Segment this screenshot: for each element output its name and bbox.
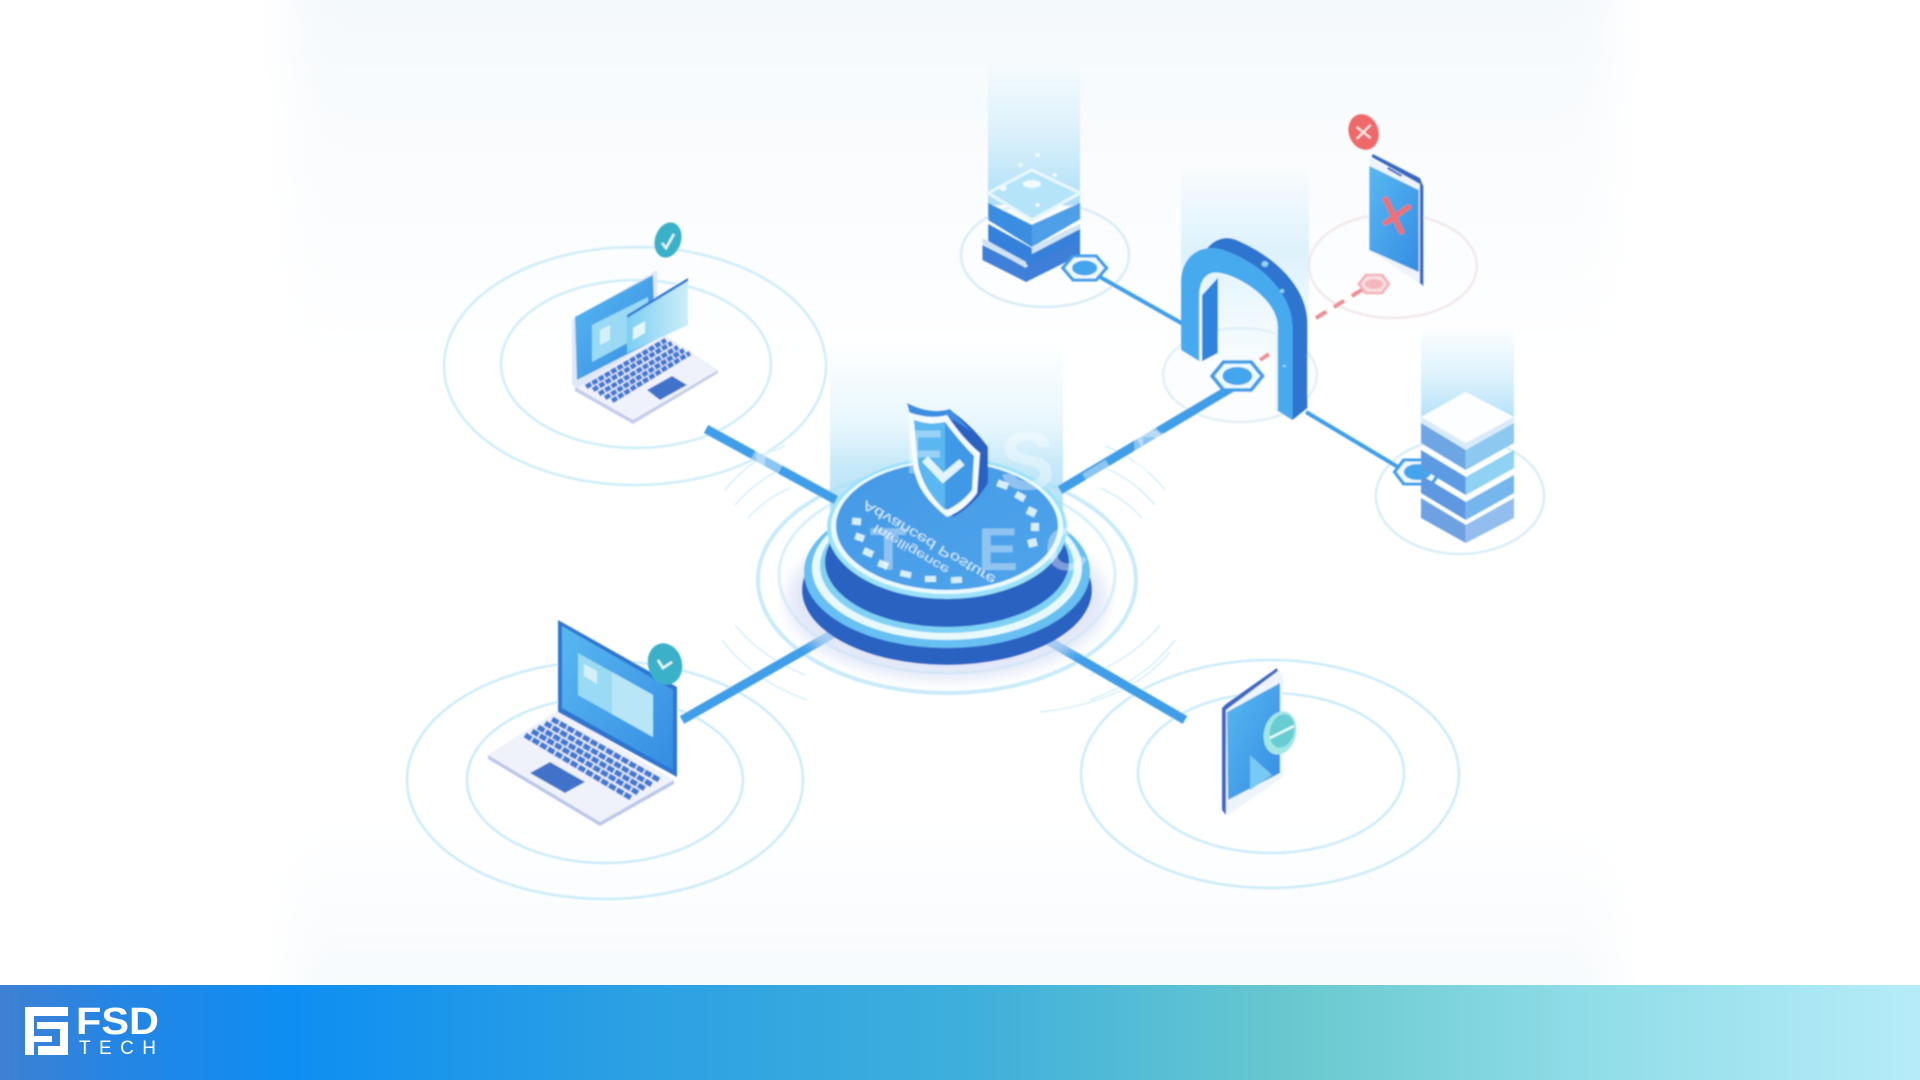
phone shadow and body: [1222, 668, 1283, 815]
arch rivets: [1261, 261, 1286, 368]
network diagram: [407, 60, 1544, 899]
connector lines: [682, 277, 1398, 720]
hex node: upper server: [1063, 256, 1106, 280]
rings: lower-right phone: [1081, 660, 1459, 888]
rings: lower-left laptop: [407, 661, 803, 899]
phone: blocked: [1345, 112, 1423, 286]
disc label: [860, 497, 998, 588]
hub shadow: [787, 520, 1107, 680]
laptop base: [575, 333, 718, 420]
laptop screen: [572, 270, 658, 388]
rings: upper-left laptop: [444, 247, 826, 485]
laptop keyboard: [586, 340, 690, 401]
watermark: T: [870, 516, 907, 583]
hex node: blocked phone: [1359, 275, 1389, 293]
phone: lower right: [1222, 668, 1301, 815]
hub top disc: [827, 457, 1067, 599]
arch side: [1207, 238, 1307, 420]
hub base layers: [802, 515, 1092, 665]
laptop base: [488, 710, 674, 822]
logo mark: [25, 1007, 68, 1055]
hub halo rings and signal arcs: [722, 446, 1175, 712]
phone screen: [1227, 683, 1280, 800]
phone screen: [1369, 166, 1419, 272]
disc dashes: [852, 480, 1039, 583]
badge: red x: [1345, 112, 1383, 152]
watermark: F: [905, 418, 943, 487]
laptop: lower left: [488, 620, 687, 826]
laptop: upper left: [572, 219, 718, 424]
watermark: C: [1045, 516, 1088, 583]
laptop screen: [558, 620, 677, 777]
disc label: Intelligence: [870, 521, 952, 577]
laptop keyboard: [525, 719, 659, 798]
gateway arch: [1181, 238, 1307, 420]
watermark: F: [752, 418, 790, 487]
rings: upper server, gateway, blocked phone, right server: [961, 203, 1544, 554]
laptop trackpad: [647, 376, 687, 400]
background panel: [292, 0, 1612, 1040]
floating card: [627, 278, 688, 353]
watermark: [752, 416, 1175, 583]
icon: shield: [907, 403, 988, 517]
hex node: right server: [1395, 460, 1441, 484]
logo wordmark: FSD: [76, 1001, 159, 1043]
icon: red cross: [1385, 199, 1408, 232]
hex node: gateway: [1212, 362, 1263, 390]
arch front: [1181, 248, 1292, 420]
server: upper: [982, 153, 1080, 282]
phone body: [1369, 158, 1423, 286]
badge: check: [650, 219, 686, 261]
laptop trackpad: [530, 762, 585, 793]
watermark: E: [978, 516, 1018, 583]
badge: minus: [1259, 708, 1301, 758]
light pillars: [830, 60, 1514, 510]
footer band: TECH: [79, 1038, 156, 1059]
watermark: D: [1130, 418, 1175, 487]
disc label: Advanced Posture: [860, 497, 998, 588]
arch inner wall: [1201, 278, 1218, 362]
watermark: S: [1000, 416, 1055, 507]
badge: check: [643, 639, 687, 689]
server: right: [1421, 392, 1514, 543]
blocked dashed connection: [1260, 288, 1365, 360]
central hub: [787, 403, 1107, 680]
footer band: [0, 985, 1920, 1080]
